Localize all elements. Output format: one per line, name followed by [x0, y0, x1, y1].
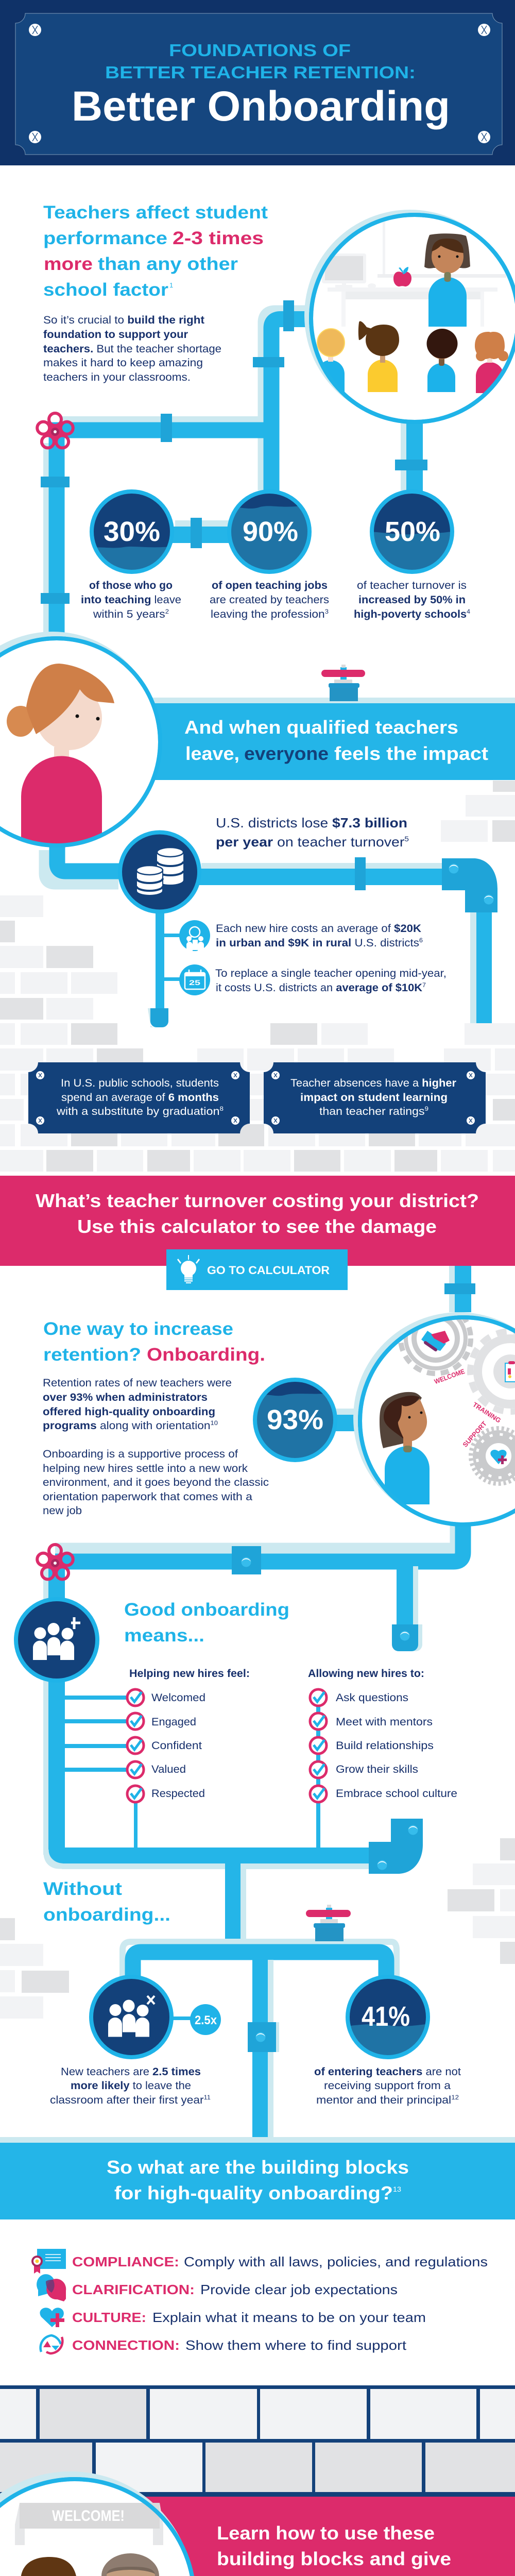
onboarding text: [43, 1377, 269, 1517]
pipe flanges: [41, 300, 427, 604]
pipes: without onboarding: [52, 1819, 423, 2151]
onboarding text: helping new hires settle into a new work: [43, 1463, 248, 1475]
good onboarding heading: means...: [124, 1625, 204, 1646]
stat circle: 41%: 41%: [362, 2001, 410, 2032]
classroom furniture: [322, 214, 506, 327]
onboarding text: over 93% when administrators: [43, 1392, 208, 1403]
building block: compliance: COMPLIANCE:: [72, 2254, 179, 2269]
cost text: 5: [404, 835, 409, 843]
cost detail text: in urban and $9K in rural U.S. districts: [216, 937, 415, 949]
onboarding heading: retention?: [43, 1345, 141, 1365]
intro heading: more: [44, 254, 93, 274]
stat circle: 41%: [345, 1977, 433, 2061]
title: Better Onboarding: [72, 83, 450, 130]
calculator band: What’s teacher turnover costing your district?: [36, 1190, 479, 1211]
cost text: per year on teacher turnover: [216, 834, 393, 850]
impact banner text: leave,: [185, 743, 239, 764]
cost detail text: To replace a single teacher opening mid-year,: [215, 968, 447, 979]
brick wall background: [0, 781, 515, 1172]
checklist: allow: Meet with mentors: [336, 1716, 433, 1728]
people plus icon: [16, 1599, 97, 1681]
icon: heart plus: [40, 2308, 64, 2327]
intro heading: Teachers affect student: [43, 202, 268, 223]
impact banner text: And when qualified teachers: [184, 717, 458, 738]
caption: 41%: mentor and their principal: [316, 2094, 438, 2106]
onboarding text: orientation paperwork that comes with a: [43, 1491, 252, 1503]
intro text: teachers in your classrooms.: [43, 371, 191, 383]
building block: clarification: CLARIFICATION:: [72, 2282, 195, 2297]
caption: 41%: 12: [451, 2094, 459, 2101]
welcome sign: WELCOME!: [52, 2507, 125, 2524]
building blocks banner: [0, 2137, 515, 2219]
checklist: allow: Ask questions: [336, 1692, 408, 1704]
intro text: So it’s crucial to build the right: [43, 314, 204, 326]
caption: 50%: [354, 580, 470, 620]
stat circle: 93%: [252, 1380, 340, 1463]
checklist: feel: Confident: [151, 1740, 202, 1752]
good onboarding heading: Good onboarding: [124, 1600, 289, 1620]
caption: 90%: [210, 580, 329, 620]
gear: support: [471, 1428, 515, 1484]
stat circle: 93%: 93%: [267, 1404, 323, 1435]
caption: 30%: 2: [165, 608, 169, 615]
teacher with yellow top: [21, 2557, 79, 2576]
gear: welcome: [399, 1319, 473, 1376]
blog text: [216, 2522, 451, 2576]
pipe elbow: [369, 1819, 423, 1874]
intro heading: performance: [43, 228, 167, 248]
teacher with glasses: [101, 2553, 160, 2576]
pipes: section one: [37, 300, 427, 639]
blog panel: [0, 2497, 515, 2576]
onboarding text: environment, and it goes beyond the classic: [43, 1477, 269, 1488]
valve wheel: [37, 1545, 73, 1579]
intro heading: than any other: [98, 254, 238, 274]
checklist: feel: Engaged: [151, 1716, 196, 1728]
stat circle: 50%: 50%: [385, 516, 440, 547]
checklist: allow: Build relationships: [336, 1740, 434, 1752]
plaque: absences: Teacher absences have a higher: [290, 1077, 456, 1089]
caption: 30%: of those who go: [89, 580, 173, 591]
building block: culture: Explain what it means to be on your team: [152, 2310, 426, 2325]
without onboarding heading: onboarding...: [43, 1905, 170, 1925]
woman figure: [7, 664, 114, 850]
checklist: allow: [308, 1668, 457, 1802]
onboarding text: programs along with orientation: [43, 1420, 202, 1432]
pipe end cap: [148, 1008, 168, 1027]
stat circle: 30%: 30%: [104, 516, 160, 547]
pipes: impact section: [47, 698, 515, 1027]
caption: 2.5 times: classroom after their first year: [50, 2094, 193, 2106]
new teacher figure: [380, 1392, 430, 1504]
cost detail text: [215, 923, 447, 994]
intro text: teachers. But the teacher shortage: [43, 343, 221, 355]
cost detail text: 6: [419, 937, 423, 944]
header banner: [0, 0, 515, 165]
impact banner background: [152, 703, 515, 780]
2.5x bubble: 2.5x: [195, 2013, 217, 2027]
building block: clarification: [37, 2274, 398, 2301]
impact banner text: feels the impact: [334, 743, 488, 764]
impact banner text: [184, 717, 488, 764]
cost detail text: 7: [422, 981, 426, 989]
icon: clipboard: [505, 1361, 515, 1382]
classroom circle: [304, 210, 515, 422]
checklist: allow: Allowing new hires to:: [308, 1668, 424, 1680]
building block: culture: [40, 2308, 426, 2327]
title: FOUNDATIONS OF: [169, 41, 351, 60]
icon: heart: [490, 1450, 507, 1464]
gear labels: WELCOME: [433, 1367, 466, 1385]
checklist: feel: Helping new hires feel:: [129, 1668, 250, 1680]
building block: clarification: Provide clear job expectations: [200, 2282, 398, 2297]
stat circle: 50%: [371, 492, 456, 577]
icon: coin stacks: [136, 848, 183, 895]
building block: connection: Show them where to find support: [185, 2337, 407, 2353]
caption: 41%: of entering teachers are not: [314, 2066, 461, 2078]
building blocks banner: 13: [393, 2185, 401, 2193]
impact banner text: everyone: [244, 743, 329, 764]
caption: 90%: 3: [325, 608, 329, 615]
checklist: allow: Grow their skills: [336, 1764, 418, 1775]
caption: 50%: of teacher turnover is: [357, 580, 467, 591]
caption: 90%: are created by teachers: [210, 594, 329, 606]
caption: 50%: 4: [467, 608, 470, 615]
plaque: absences: than teacher ratings: [319, 1106, 415, 1117]
plaque: substitute: In U.S. public schools, students: [61, 1077, 219, 1089]
title: BETTER TEACHER RETENTION:: [105, 63, 416, 82]
blog text: Learn how to use these: [217, 2522, 435, 2544]
pipe fitting: [232, 1543, 261, 1574]
pipe fitting: [248, 2022, 279, 2052]
gear labels: SUPPORT: [461, 1420, 488, 1449]
caption: 30%: [81, 580, 181, 620]
icon: cycle arrows: [41, 2335, 62, 2353]
building block: connection: [41, 2335, 407, 2353]
cost text: U.S. districts lose $7.3 billion: [216, 815, 407, 831]
checklist: feel: Valued: [151, 1764, 186, 1775]
caption: 2.5 times: more likely to leave the: [71, 2080, 191, 2092]
building blocks banner: So what are the building blocks: [107, 2157, 409, 2178]
checklist: feel: Welcomed: [151, 1692, 205, 1704]
caption: 41%: [314, 2066, 461, 2106]
building block: compliance: Comply with all laws, policies, and regulations: [184, 2254, 488, 2269]
plaque: substitute: spend an average of 6 months: [61, 1092, 219, 1104]
welcome sign: [15, 2503, 163, 2545]
building blocks banner: for high-quality onboarding?: [114, 2182, 393, 2204]
valve on banner: [321, 665, 365, 701]
coin circle icon: [120, 833, 199, 912]
onboarding text: Onboarding is a supportive process of: [43, 1448, 238, 1460]
cost detail text: it costs U.S. districts an average of $10K: [216, 982, 419, 994]
icon: recruiter search: [179, 920, 210, 951]
gear labels: [433, 1367, 502, 1449]
2.5x bubble: [190, 2004, 221, 2035]
caption: 50%: increased by 50% in: [358, 594, 466, 606]
building block: compliance: [31, 2249, 488, 2274]
stat circle: 30%: [88, 492, 175, 577]
bricks: without onboarding: [0, 1838, 515, 2019]
student figures: [317, 321, 508, 394]
title: [72, 41, 450, 130]
pipes: onboarding top: [335, 1266, 475, 1431]
plaque: substitute: 8: [220, 1105, 224, 1112]
pipes: good onboarding: [37, 1525, 463, 1857]
intro text: foundation to support your: [43, 329, 188, 341]
stat circle: 90%: 90%: [243, 516, 298, 547]
calculator button: GO TO CALCULATOR: [207, 1264, 330, 1277]
caption: 30%: into teaching leave: [81, 594, 181, 606]
checklist: feel: [127, 1668, 250, 1802]
gear: training: [470, 1331, 515, 1412]
onboarding heading: Onboarding.: [147, 1345, 265, 1365]
plaque: substitute: [28, 1062, 250, 1133]
onboarding gears circle: [353, 1303, 515, 1524]
intro heading: 1: [169, 281, 173, 289]
calculator button: [166, 1249, 348, 1290]
plaque: absences: 9: [425, 1105, 428, 1112]
caption: 41%: receiving support from a: [324, 2080, 451, 2092]
onboarding text: Retention rates of new teachers were: [43, 1377, 232, 1389]
good onboarding heading: [124, 1600, 289, 1646]
caption: 90%: of open teaching jobs: [212, 580, 328, 591]
checklist: allow: Embrace school culture: [336, 1788, 457, 1800]
intro text: [43, 314, 221, 383]
valve: [306, 1905, 351, 1941]
icon: light bulb: [177, 1255, 200, 1283]
welcome circle: [0, 2471, 194, 2576]
caption: 50%: high-poverty schools: [354, 608, 463, 620]
pipe end cap: [392, 1624, 422, 1651]
intro heading: [43, 202, 268, 300]
icon: speech bubbles: [37, 2274, 66, 2301]
intro text: makes it hard to keep amazing: [43, 357, 203, 369]
calculator band: Use this calculator to see the damage: [77, 1216, 437, 1237]
caption: 90%: leaving the profession: [211, 608, 316, 620]
pipe elbow: [442, 858, 497, 912]
icon: handshake: [421, 1331, 450, 1351]
apple: [393, 267, 411, 286]
impact circle with woman: [0, 632, 160, 850]
plaque: absences: impact on student learning: [300, 1092, 448, 1104]
onboarding heading: One way to increase: [43, 1319, 233, 1339]
onboarding text: new job: [43, 1505, 82, 1517]
caption: 2.5 times: New teachers are 2.5 times: [61, 2066, 201, 2078]
onboarding text: 10: [211, 1419, 218, 1427]
cost detail text: Each new hire costs an average of $20K: [216, 923, 421, 935]
teacher figure: [424, 233, 470, 327]
without onboarding heading: Without: [43, 1879, 122, 1899]
checklist connectors: [65, 1696, 320, 1850]
intro heading: 2-3 times: [173, 228, 264, 248]
brick wall band: [0, 2385, 515, 2499]
onboarding text: offered high-quality onboarding: [43, 1406, 215, 1418]
icon: certificate: [31, 2249, 66, 2274]
without onboarding heading: [43, 1879, 170, 1925]
icon: calendar: 25: [189, 978, 200, 987]
caption: 2.5 times: [50, 2066, 211, 2106]
people x icon: [91, 1977, 171, 2057]
onboarding heading: [43, 1319, 265, 1365]
caption: 2.5 times: 11: [204, 2094, 211, 2101]
building block: culture: CULTURE:: [72, 2310, 146, 2325]
gear labels: TRAINING: [471, 1400, 502, 1425]
checklist: feel: Respected: [151, 1788, 205, 1800]
plaque: substitute: with a substitute by graduation: [57, 1106, 203, 1117]
stat circle: 90%: [227, 492, 314, 577]
valve wheel: [37, 413, 73, 448]
building block: connection: CONNECTION:: [72, 2337, 180, 2353]
plaque: absences: [264, 1062, 486, 1133]
cost text: [216, 815, 409, 850]
icon: calendar: [179, 964, 210, 995]
calculator band: [0, 1176, 515, 1266]
blog text: building blocks and give: [217, 2548, 451, 2569]
caption: 30%: within 5 years: [93, 608, 159, 620]
intro heading: school factor: [43, 280, 168, 300]
